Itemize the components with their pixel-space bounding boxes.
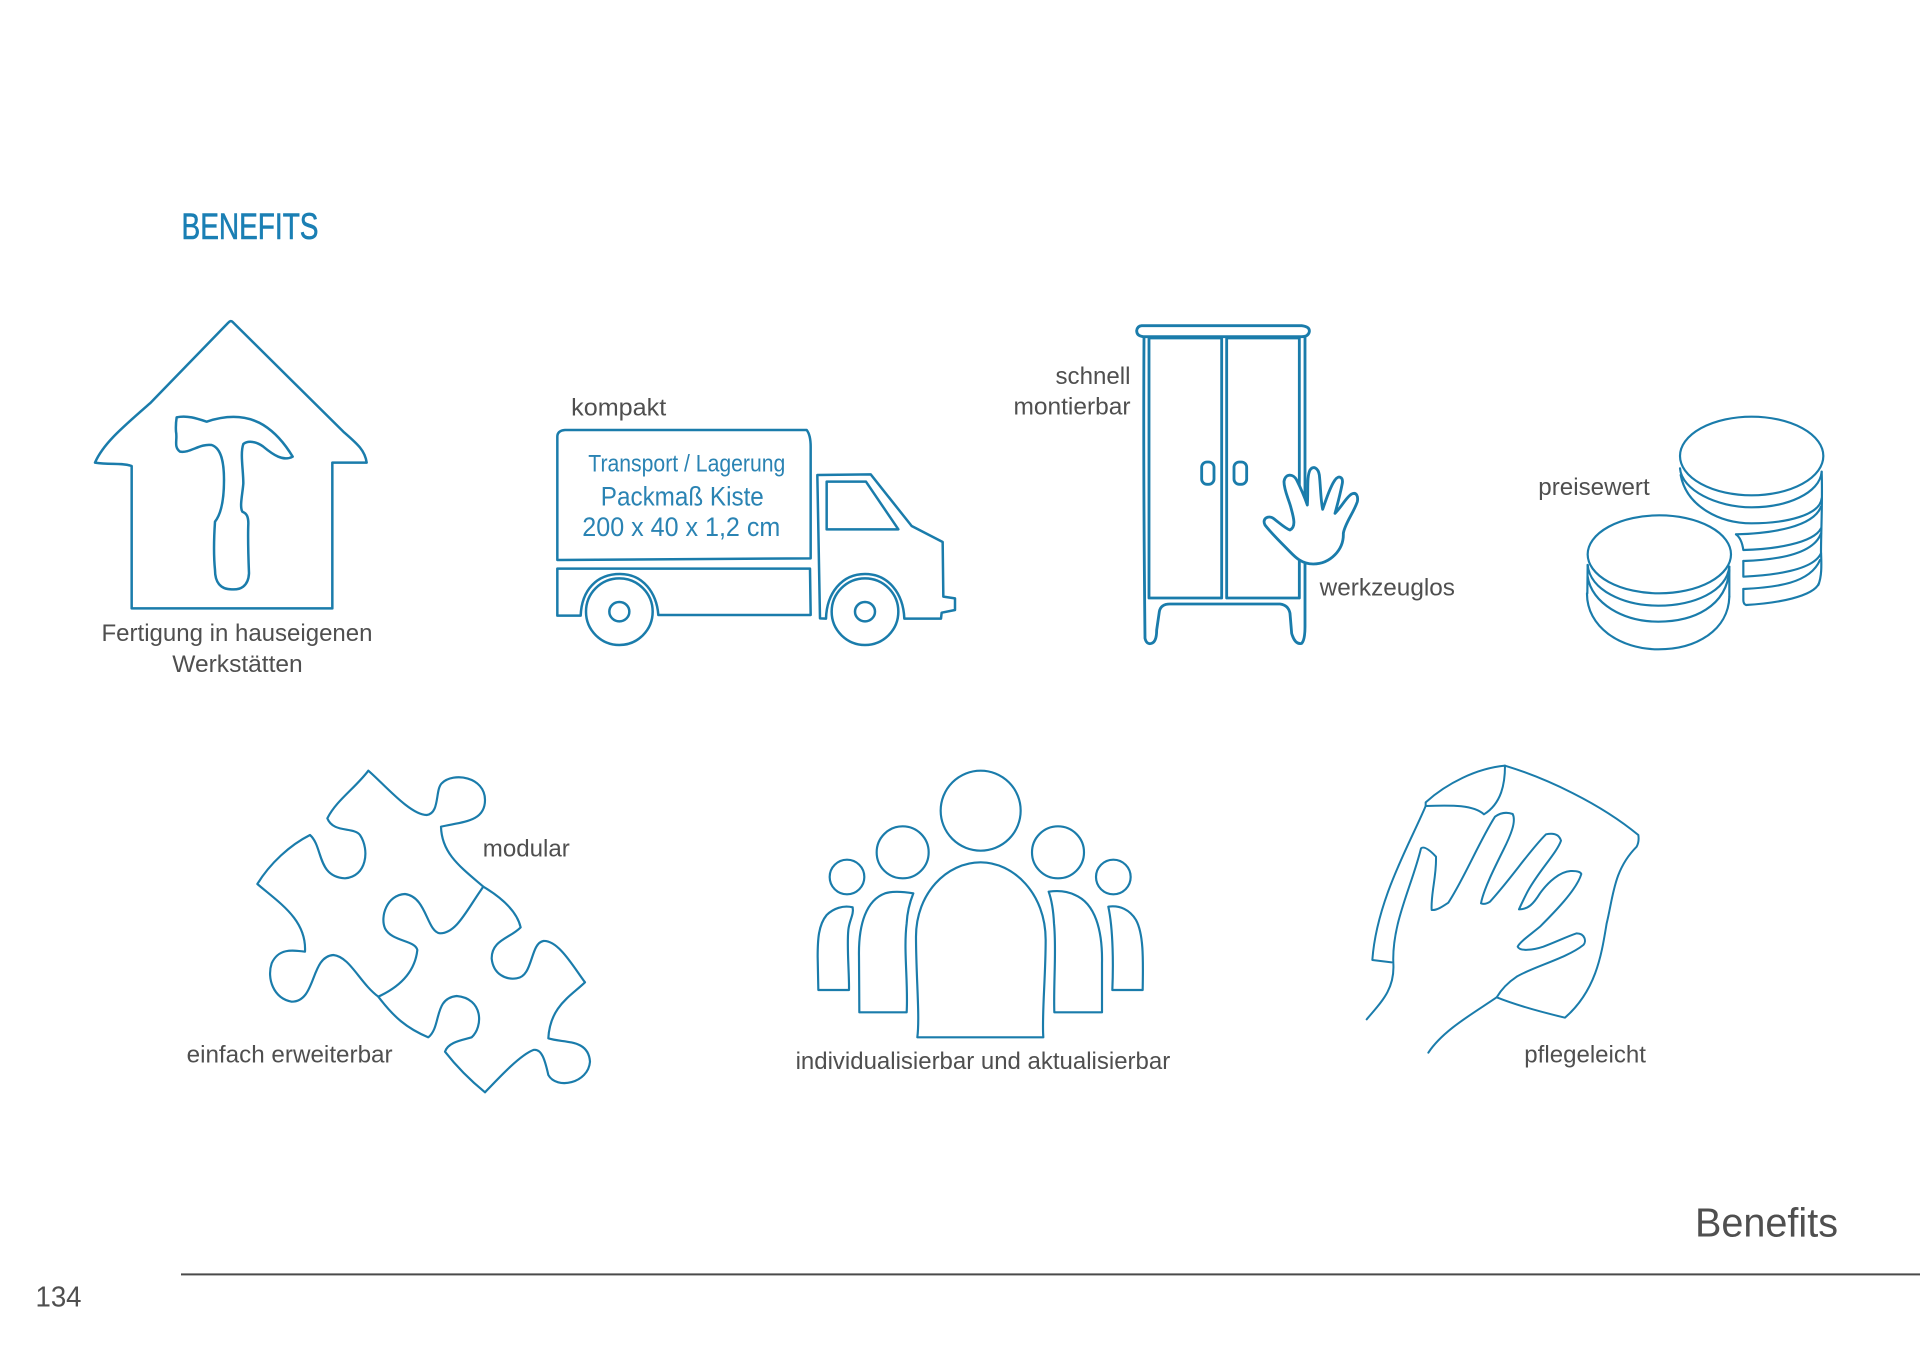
panel: schnell montierbar, werkzeuglos — [1014, 326, 1455, 644]
label: Fertigung in hauseigenen Werkstätten: Werkstätten — [172, 651, 303, 678]
icon: coin stacks — [1587, 417, 1823, 649]
section name: Benefits: Benefits — [1695, 1200, 1838, 1246]
icon: puzzle pieces — [257, 771, 590, 1092]
icon: hand wiping with cloth — [1367, 766, 1639, 1053]
label: preisewert: preisewert — [1538, 474, 1650, 501]
label: individualisierbar und aktualisierbar: individualisierbar und aktualisierbar — [796, 1048, 1170, 1075]
label: modular: modular — [483, 836, 570, 863]
panel: Fertigung in hauseigenen Werkstätten — [95, 321, 372, 678]
panel: kompakt truck — [557, 395, 955, 645]
icon: wardrobe with hand — [1137, 326, 1358, 644]
title: BENEFITS — [182, 206, 318, 247]
truck text: dimensions: 200 x 40 x 1,2 cm — [582, 512, 780, 542]
panel: pflegeleicht — [1367, 766, 1646, 1069]
label: schnell montierbar — [1014, 363, 1131, 421]
panel: modular, einfach erweiterbar — [187, 771, 590, 1092]
label: pflegeleicht: pflegeleicht — [1524, 1042, 1646, 1069]
label: schnell montierbar: montierbar — [1014, 394, 1131, 421]
label: einfach erweiterbar: einfach erweiterbar — [187, 1041, 393, 1068]
icon: group of people — [818, 771, 1143, 1037]
panel: individualisierbar und aktualisierbar — [796, 771, 1170, 1075]
truck text: Packmaß Kiste: Packmaß Kiste — [601, 481, 764, 511]
label: Fertigung in hauseigenen Werkstätten — [102, 620, 372, 678]
page number: 134 — [36, 1282, 82, 1314]
panel: preisewert — [1538, 417, 1823, 649]
icon: truck — [557, 430, 955, 645]
label: werkzeuglos: werkzeuglos — [1319, 575, 1455, 602]
icon: house with hammer — [95, 321, 367, 608]
label: kompakt: kompakt — [571, 395, 667, 422]
label: schnell montierbar: schnell — [1056, 363, 1130, 390]
label: Fertigung in hauseigenen Werkstätten: Fertigung in hauseigenen — [102, 620, 372, 647]
truck text: Transport / Lagerung: Transport / Lagerung — [588, 451, 785, 478]
